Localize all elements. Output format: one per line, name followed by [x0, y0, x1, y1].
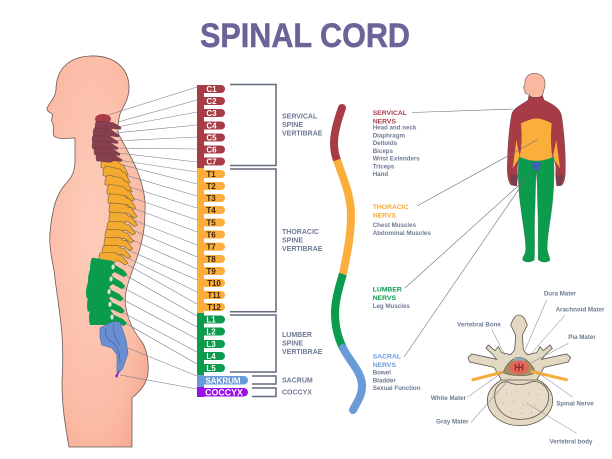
- thoracic nervs text: THORACIC: [373, 204, 409, 211]
- pelvis: [531, 163, 541, 172]
- lumbar label stack: [197, 313, 225, 375]
- sacral nervs text: SACRAL: [373, 354, 401, 360]
- thoracic label stack: T7: [206, 243, 216, 252]
- region label: lumber spine vertibrae: VERTIBRAE: [282, 349, 323, 356]
- cervical label stack: [197, 85, 225, 168]
- vertebral body: [487, 376, 553, 426]
- spine: lumbar vertebrae: [85, 258, 129, 326]
- region label: lumber spine vertibrae: SPINE: [282, 340, 303, 348]
- head and neck: [524, 73, 545, 97]
- thoracic label stack: T5: [206, 218, 216, 228]
- spinal canal: [503, 357, 536, 376]
- label: arachnoid mater: Arachnoid Mater: [556, 306, 605, 314]
- label: vertebral bone: Vertebral Bone: [457, 322, 501, 328]
- thoracic label stack: T4: [206, 206, 216, 215]
- sacral nervs text: Bowel: [373, 370, 391, 376]
- brackets: [230, 84, 276, 396]
- lumber nervs text: LUMBER: [373, 286, 402, 294]
- coccyx label: COCCYX: [205, 387, 243, 397]
- front body figure: [507, 73, 565, 262]
- thoracic label stack: T6: [206, 230, 216, 240]
- nerve leader lines: [404, 109, 537, 357]
- label: pia mater: Pia Mater: [568, 334, 596, 341]
- leader lines: spine to vertebra labels: [108, 87, 197, 389]
- label: gray mater: Gray Mater: [436, 418, 469, 426]
- label: white mater: White Mater: [431, 395, 467, 402]
- spine: cervical vertebrae: [92, 114, 122, 164]
- cervical label stack: C6: [206, 146, 217, 154]
- lumber nervs text: Leg Muscles: [373, 303, 410, 310]
- servical nervs text: Diaphragm: [373, 132, 406, 139]
- cervical label stack: C1: [206, 85, 217, 94]
- cord: [513, 357, 525, 363]
- thoracic label stack: T1: [206, 170, 216, 179]
- region label: servical spine vertibrae: VERTIBRAE: [282, 130, 323, 138]
- thoracic label stack: T10: [207, 279, 221, 288]
- title: SPINAL CORD: [200, 17, 410, 55]
- region label: servical spine vertibrae: SERVICAL: [282, 114, 318, 120]
- region label: coccyx: COCCYX: [282, 390, 312, 396]
- legs: [518, 157, 554, 262]
- lumbar label stack: L2: [206, 328, 216, 336]
- cervical label stack: C3: [206, 109, 217, 118]
- label: spinal nerve: Spinal Nerve: [556, 400, 594, 408]
- sacral nervs text: Sexual Function: [373, 385, 421, 392]
- thoracic nervs text: NERVS: [373, 212, 396, 220]
- region label: sacrum: SACRUM: [282, 378, 313, 384]
- servical nervs text: NERVS: [373, 118, 396, 126]
- thoracic label stack: T9: [206, 267, 216, 276]
- servical nervs text: Biceps: [373, 148, 394, 155]
- spinal nerves: [472, 371, 568, 380]
- cervical label stack: C7: [206, 158, 217, 166]
- vertebral bone arch: [468, 315, 571, 380]
- hands: [510, 175, 563, 186]
- side body silhouette: [47, 56, 148, 447]
- label: vertebral body: Vertebral body: [550, 438, 593, 446]
- body speckles: [502, 391, 539, 414]
- sacral nervs text: NERVS: [373, 362, 396, 369]
- region label: thoracic spine vertibrae: THORACIC: [282, 229, 319, 236]
- lumber nervs text: NERVS: [373, 295, 396, 302]
- servical nervs text: Head and neck: [373, 124, 417, 132]
- lumbar label stack: L3: [206, 340, 216, 349]
- servical nervs text: Hand: [373, 171, 388, 178]
- thoracic label stack: T11: [207, 291, 221, 300]
- region label: thoracic spine vertibrae: VERTIBRAE: [282, 246, 323, 253]
- sacrum label: SAKRUM: [205, 376, 241, 385]
- region label: servical spine vertibrae: SPINE: [282, 122, 303, 129]
- servical nervs text: SERVICAL: [373, 110, 407, 117]
- thoracic label stack: T12: [207, 303, 221, 312]
- thoracic label stack: [197, 168, 225, 313]
- spinal curve: [334, 108, 362, 410]
- cross-section leader lines: [467, 300, 577, 433]
- label: dura mater: Dura Mater: [544, 290, 577, 298]
- vertebra labels column: [197, 85, 248, 397]
- lumbar label stack: L4: [206, 352, 216, 361]
- lumbar label stack: L1: [206, 316, 216, 324]
- arm nerve strips: [513, 140, 560, 168]
- lumbar label stack: L5: [206, 364, 216, 373]
- arms and shoulders: [507, 95, 565, 186]
- torso: [520, 118, 552, 161]
- region label: lumber spine vertibrae: LUMBER: [282, 332, 312, 339]
- spine: thoracic vertebrae: [99, 157, 139, 265]
- thoracic nervs text: Abdominal Muscles: [373, 230, 431, 237]
- sacral nervs text: Bladder: [373, 377, 396, 384]
- vertebra cross-section: [467, 300, 577, 433]
- thoracic label stack: T3: [206, 194, 216, 203]
- region label: thoracic spine vertibrae: SPINE: [282, 238, 303, 244]
- servical nervs text: Triceps: [373, 163, 395, 170]
- body inner line: [495, 382, 549, 419]
- lumber nervs text: [373, 286, 410, 310]
- cervical label stack: C4: [206, 122, 217, 130]
- spine: sacrum: [100, 322, 128, 375]
- sacrum label: [197, 375, 248, 387]
- spine: coccyx: [115, 370, 120, 378]
- servical nervs text: [373, 110, 420, 178]
- sacral nervs text: [373, 354, 421, 392]
- thoracic label stack: T2: [206, 182, 216, 191]
- cervical label stack: C2: [206, 97, 217, 106]
- cervical label stack: C5: [206, 134, 217, 142]
- servical nervs text: Deltoids: [373, 140, 398, 147]
- thoracic nervs text: [373, 204, 431, 237]
- thoracic label stack: T8: [206, 255, 216, 264]
- servical nervs text: Wrist Extenders: [373, 156, 420, 162]
- thoracic nervs text: Chest Muscles: [373, 222, 417, 229]
